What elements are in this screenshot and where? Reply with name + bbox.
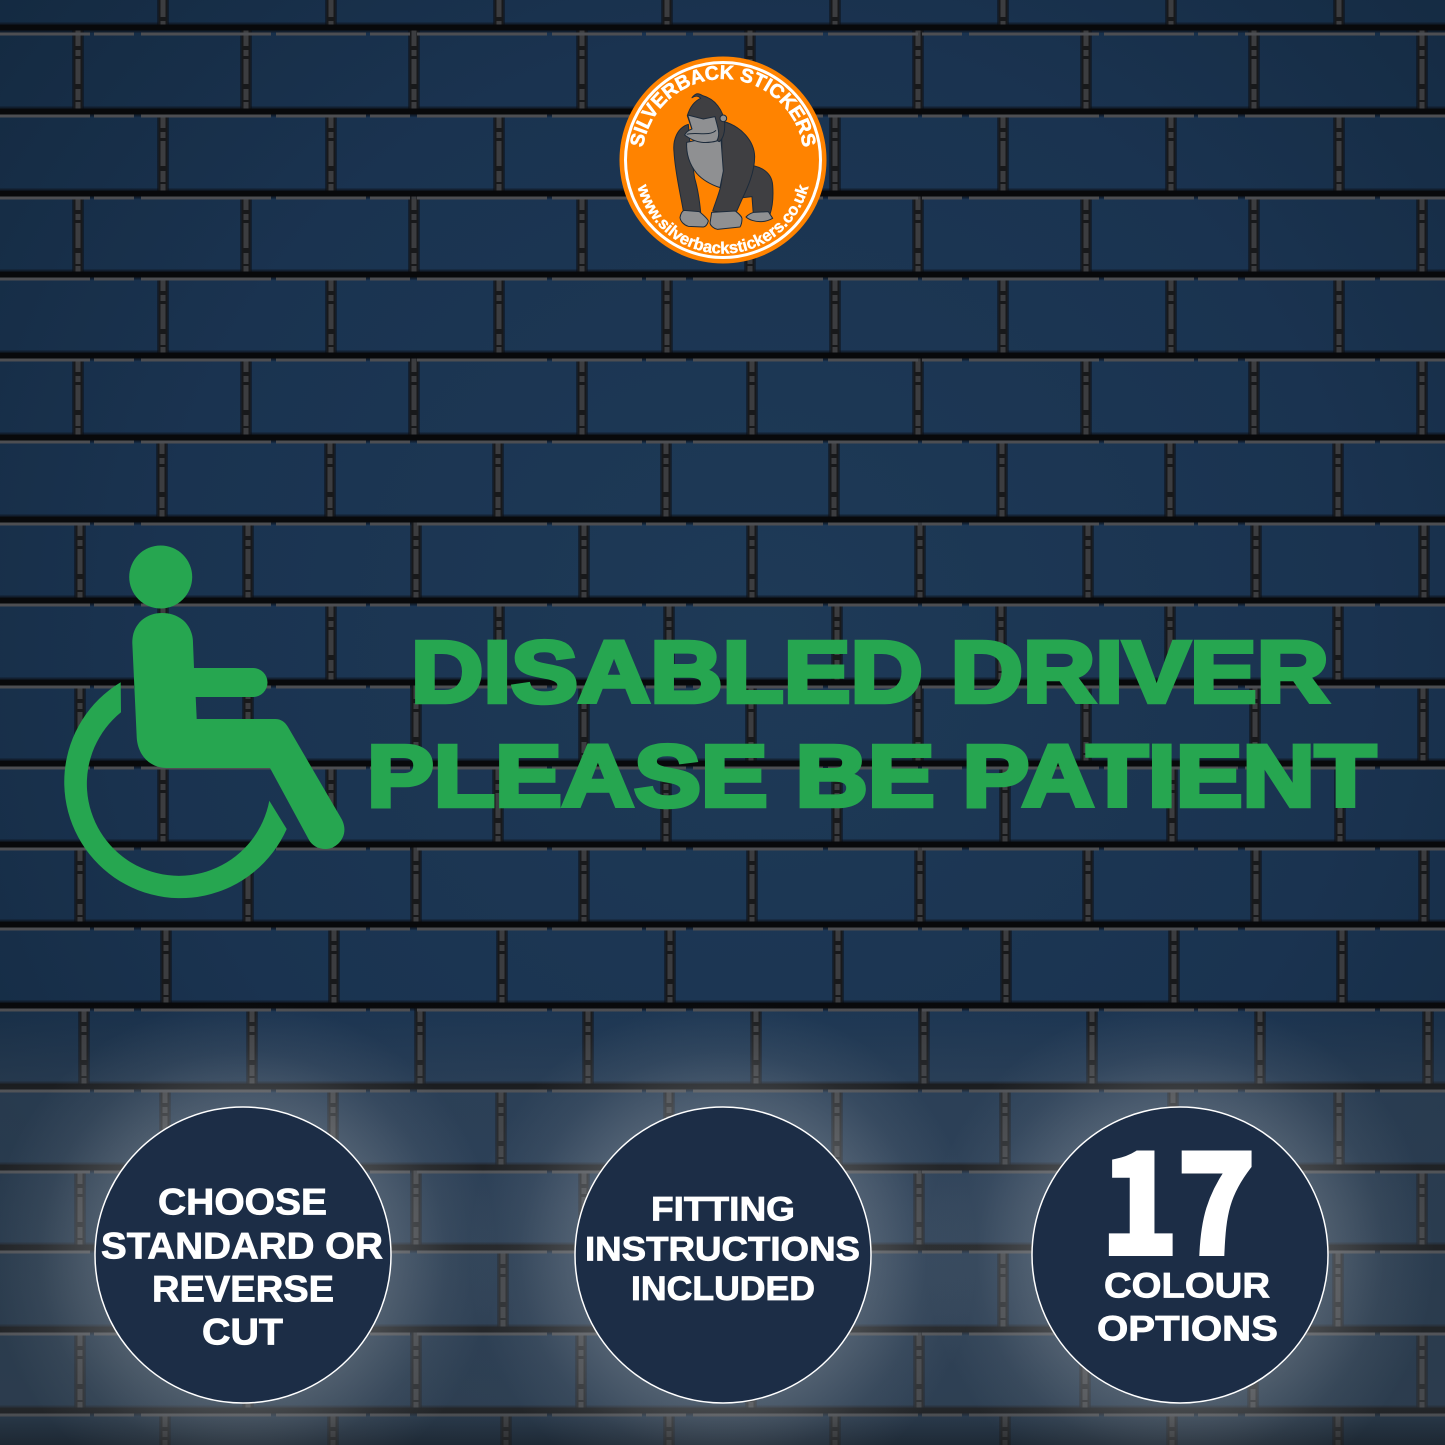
title: Disabled Driver Please Be Patient: PLEASE BE PATIENT xyxy=(367,728,1376,825)
badge: 17 colour options: OPTIONS xyxy=(1097,1310,1278,1348)
badge: choose standard or reverse cut: CHOOSE xyxy=(158,1182,327,1222)
icon: gorilla mascot xyxy=(674,94,773,229)
badge: fitting instructions included: FITTING xyxy=(651,1190,795,1228)
logo text: brand name: SILVERBACK STICKERS xyxy=(630,65,816,147)
logo text: website: www.silverbackstickers.co.uk xyxy=(638,184,809,254)
logo: Silverback Stickers badge xyxy=(620,56,826,264)
title: Disabled Driver Please Be Patient: DISABLED DRIVER xyxy=(411,624,1329,721)
icon: green wheelchair symbol xyxy=(64,546,344,898)
badge: choose standard or reverse cut: STANDARD OR xyxy=(101,1226,383,1266)
badge: fitting instructions included: INSTRUCTIONS xyxy=(585,1230,860,1268)
number: 17: 17 xyxy=(1101,1093,1255,1293)
badge: choose standard or reverse cut: CUT xyxy=(202,1312,283,1352)
badge: 17 colour options: COLOUR xyxy=(1104,1266,1270,1306)
badge: fitting instructions included xyxy=(575,1107,871,1403)
badge: 17 colour options xyxy=(1032,1093,1328,1403)
badge: fitting instructions included: INCLUDED xyxy=(631,1270,815,1308)
title: Disabled Driver Please Be Patient xyxy=(367,624,1376,825)
badge: choose standard or reverse cut: REVERSE xyxy=(152,1268,334,1310)
badge: choose standard or reverse cut xyxy=(95,1107,391,1403)
